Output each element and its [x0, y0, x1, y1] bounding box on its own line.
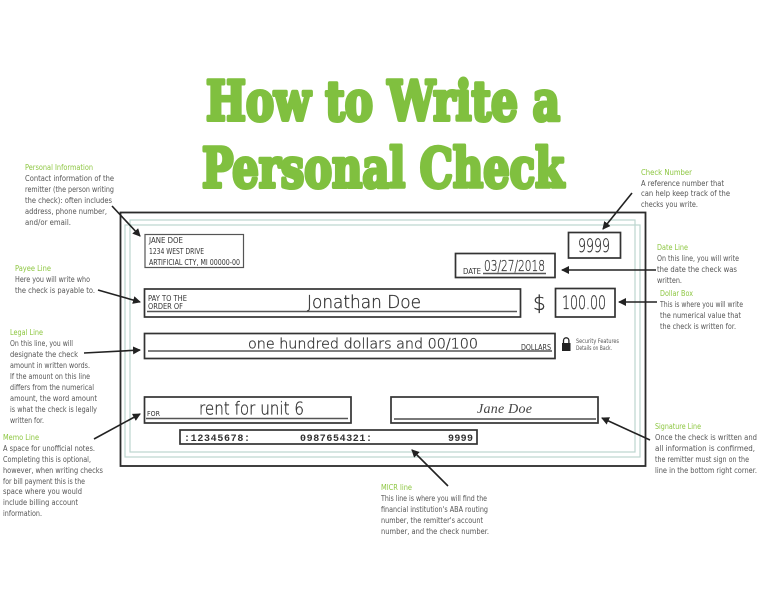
security features note: Security Features [576, 338, 619, 345]
remitter address box: ARTIFICIAL CTY, MI 00000-00 [149, 258, 240, 267]
text block: payee line: Payee Line [15, 263, 51, 273]
text block: personal information: and/or email. [25, 217, 71, 227]
arrow: MICR line [412, 450, 448, 486]
text block: memo line: for bill payment this is the [3, 476, 85, 486]
MICR line box [180, 430, 477, 445]
payee box: ORDER OF [148, 302, 183, 311]
text block: date line: Date Line [657, 242, 688, 252]
text block: legal line: amount in written words. [10, 360, 90, 370]
date box [456, 254, 555, 278]
text block: legal line: amount, the word amount [10, 393, 98, 403]
text block: personal information: Personal Information [25, 162, 93, 172]
memo box [144, 397, 351, 423]
check outline [120, 212, 646, 466]
payee box: Jonathan Doe [307, 292, 421, 313]
MICR line box: :12345678: [184, 434, 250, 445]
text block: personal information: the check): often includes [25, 195, 112, 205]
text block: memo line: however, when writing checks [3, 465, 103, 475]
MICR line box: 9999 [448, 434, 473, 445]
text block: memo line: Completing this is optional, [3, 454, 91, 464]
remitter address box: 1234 WEST DRIVE [149, 247, 204, 256]
legal line box: one hundred dollars and 00/100 [248, 336, 478, 352]
text block: legal line [10, 327, 98, 425]
text block: memo line [3, 432, 103, 518]
text block: MICR line: MICR line [381, 482, 412, 492]
text block: signature line: Signature Line [655, 421, 701, 431]
arrow: payee line [98, 290, 140, 302]
text block: legal line: On this line, you will [10, 338, 73, 348]
text block: legal line: differs from the numerical [10, 382, 94, 392]
check number box: 9999 [578, 235, 610, 257]
icon: lock [562, 338, 570, 351]
check number box [568, 232, 620, 258]
memo box: rent for unit 6 [199, 398, 304, 420]
text block: memo line: space where you would [3, 486, 82, 496]
text block: MICR line: number, the remitter's account [381, 515, 484, 525]
text block: MICR line: financial institution's ABA routing [381, 504, 488, 514]
text block: payee line: Here you will write who [15, 274, 90, 284]
text block: personal information: remitter (the person writing [25, 184, 114, 194]
text block: signature line [655, 421, 757, 475]
text block: dollar box: the check is written for. [660, 321, 736, 331]
text block: legal line: is what the check is legally [10, 404, 97, 414]
text block: check number: can help keep track of the [641, 188, 730, 198]
date box: DATE [463, 267, 481, 276]
arrow: signature line [602, 418, 650, 440]
remitter address box [145, 234, 244, 268]
check [120, 212, 646, 466]
text block: legal line: If the amount on this line [10, 371, 90, 381]
arrow: legal line [84, 350, 140, 353]
legal line box [144, 334, 555, 358]
payee box [144, 289, 520, 317]
text block: dollar box [659, 288, 743, 331]
text block: legal line: written for. [10, 415, 44, 425]
payee box: PAY TO THE [148, 294, 187, 303]
text block: legal line: designate the check [10, 349, 78, 359]
title: How to Write a [206, 69, 560, 133]
dollar box: 100.00 [562, 292, 606, 314]
text block: personal information: address, phone number, [25, 206, 107, 216]
text block: memo line: A space for unofficial notes. [3, 443, 95, 453]
text block: date line [657, 242, 739, 285]
text block: date line: the date the check was [657, 264, 737, 274]
text block: dollar box: Dollar Box [660, 288, 693, 298]
remitter address box: JANE DOE [148, 236, 183, 245]
date box: 03/27/2018 [484, 257, 545, 275]
text block: personal information: Contact information of the [25, 173, 114, 183]
arrow: date line [562, 269, 656, 271]
text block: check number: A reference number that [641, 178, 725, 188]
title [202, 69, 565, 200]
text block: legal line: Legal Line [10, 327, 43, 337]
signature box: Jane Doe [477, 402, 532, 417]
arrow: personal information [112, 206, 140, 236]
arrow: dollar box [619, 301, 657, 303]
legal line box: DOLLARS [521, 343, 551, 352]
text block: check number [641, 167, 730, 209]
text block: personal information [25, 162, 114, 227]
text block: MICR line: number, and the check number. [381, 526, 489, 536]
dollar box [556, 288, 615, 317]
memo box: FOR [147, 410, 160, 418]
text block: memo line: Memo Line [3, 432, 39, 442]
dollar sign: $ [533, 291, 546, 315]
text block: memo line: include billing account [3, 497, 79, 507]
security features note [576, 338, 619, 352]
text block: check number: Check Number [641, 167, 692, 177]
MICR line box: 0987654321: [300, 434, 372, 445]
text block: payee line [15, 263, 95, 295]
text block: payee line: the check is payable to. [15, 285, 95, 295]
security features note: Details on Back. [576, 345, 612, 352]
title: Personal Check [202, 136, 565, 200]
arrow: check number [603, 193, 632, 229]
text block: date line: written. [657, 275, 682, 285]
arrow: memo line [94, 414, 140, 439]
text block: MICR line [380, 482, 489, 536]
signature box [391, 397, 598, 423]
text block: memo line: information. [3, 508, 42, 518]
text block: check number: checks you write. [641, 199, 698, 209]
text block: MICR line: This line is where you will find the [380, 493, 487, 503]
